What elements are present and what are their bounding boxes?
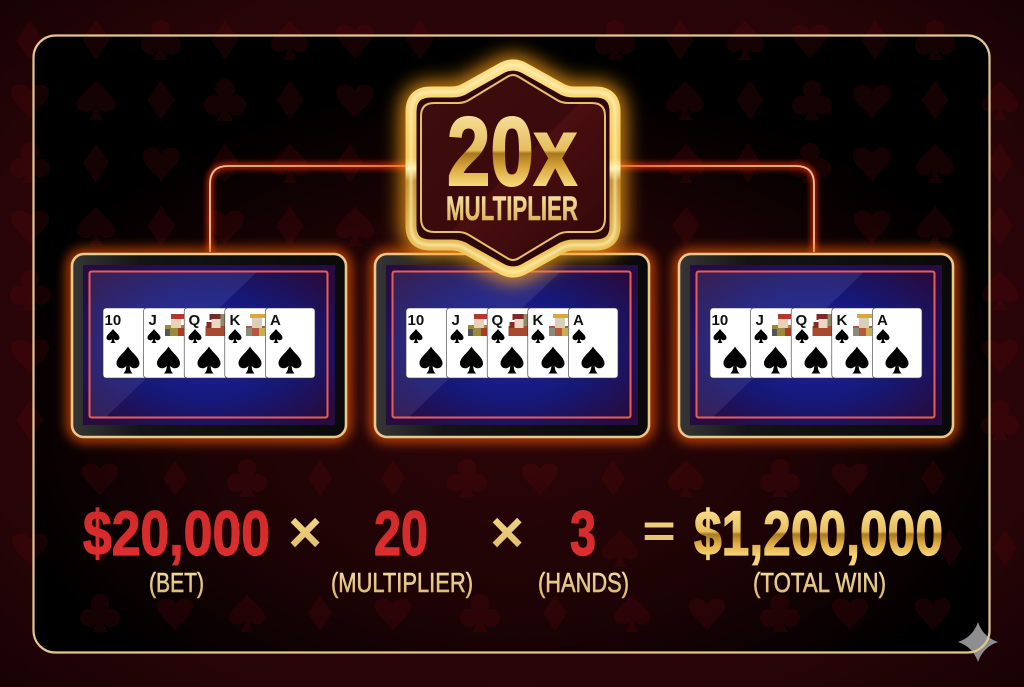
- screen: [386, 265, 638, 425]
- playing cards: royal flush: J: [756, 312, 764, 329]
- panel: left hand: [72, 254, 346, 437]
- term: multiplier: [331, 499, 473, 598]
- playing cards: royal flush: A: [270, 312, 281, 329]
- playing cards: royal flush: Q: [492, 312, 504, 329]
- term: total win: (TOTAL WIN): [753, 567, 886, 598]
- playing cards: royal flush: K: [836, 312, 848, 329]
- term: multiplier: 20: [374, 499, 428, 569]
- playing cards: royal flush: K: [230, 312, 240, 329]
- playing cards: royal flush: 10: [408, 312, 424, 329]
- term: bet: $20,000: [83, 499, 270, 569]
- screen: [83, 265, 335, 425]
- operator: times: ×: [288, 500, 322, 565]
- connector: right: [616, 166, 814, 252]
- term: total win: [694, 499, 943, 598]
- equation: [83, 499, 943, 598]
- badge value: 20x: [447, 97, 577, 206]
- playing cards: royal flush: Q: [796, 312, 808, 329]
- term: bet: [83, 499, 270, 598]
- playing cards: royal flush: K: [532, 312, 544, 329]
- playing cards: royal flush: [103, 308, 315, 378]
- playing cards: royal flush: A: [877, 312, 888, 329]
- panel: right hand: [679, 254, 953, 437]
- term: hands: [538, 499, 629, 598]
- operator: equals: =: [642, 505, 676, 557]
- badge: 20x multiplier: [411, 65, 615, 272]
- playing cards: royal flush: Q: [188, 312, 200, 329]
- term: bet: (BET): [149, 567, 204, 598]
- playing cards: royal flush: J: [452, 312, 460, 329]
- playing cards: royal flush: 10: [104, 312, 121, 329]
- operator: times: ×: [490, 500, 524, 565]
- term: total win: $1,200,000: [694, 499, 943, 569]
- icon: sparkle watermark: [958, 622, 998, 662]
- panel: center hand: [375, 254, 649, 437]
- playing cards: royal flush: [406, 308, 618, 378]
- badge label: MULTIPLIER: [446, 190, 578, 228]
- playing cards: royal flush: [710, 308, 922, 378]
- term: hands: (HANDS): [538, 567, 629, 598]
- term: hands: 3: [570, 499, 596, 569]
- playing cards: royal flush: J: [148, 312, 157, 329]
- term: multiplier: (MULTIPLIER): [331, 567, 473, 598]
- playing cards: royal flush: 10: [712, 312, 728, 329]
- connector: left: [210, 166, 410, 252]
- playing cards: royal flush: A: [573, 312, 584, 329]
- screen: [690, 265, 942, 425]
